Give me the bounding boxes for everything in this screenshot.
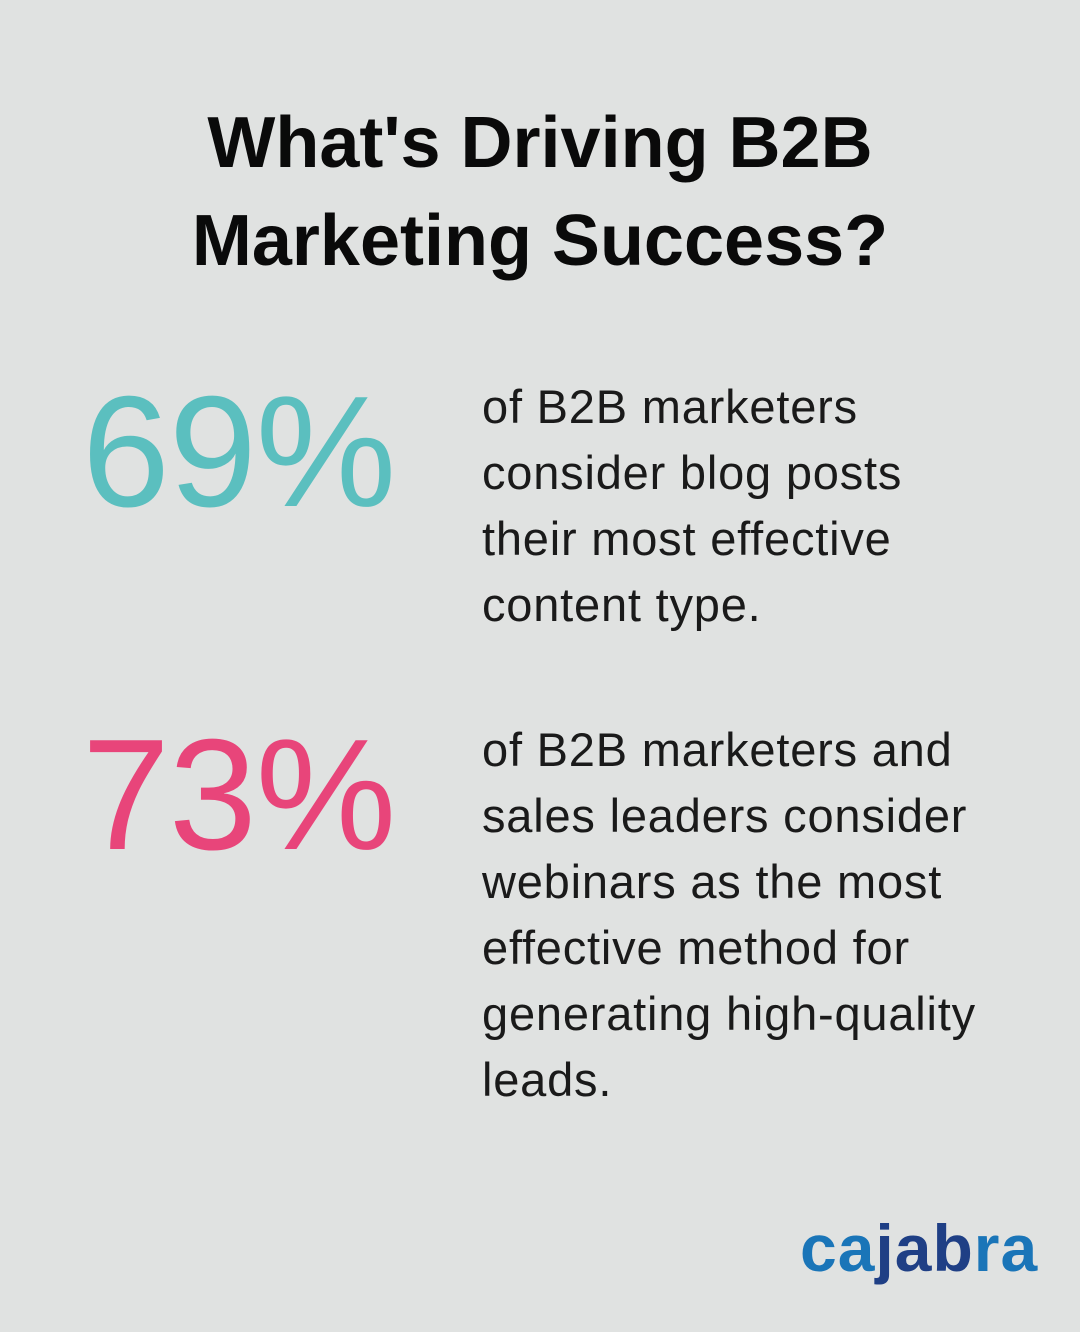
text: webinars: of B2B marketers and [482,723,953,776]
text: webinars: webinars as the most [482,855,942,908]
title [192,103,888,281]
text: webinars: effective method for [482,921,910,974]
text: webinars: leads. [482,1053,612,1106]
text: blog posts: consider blog posts [482,446,902,499]
title: Marketing Success? [192,201,888,281]
text: blog posts: of B2B marketers [482,380,858,433]
text: webinars [482,723,976,1106]
text: webinars: sales leaders consider [482,789,967,842]
text: blog posts: content type. [482,578,762,631]
text: webinars: generating high-quality [482,987,976,1040]
stat: 69%: 69% [82,364,395,540]
text: blog posts: their most effective [482,512,892,565]
logo: cajabra [800,1211,1038,1285]
text: blog posts [482,380,902,631]
title: What's Driving B2B [207,103,873,183]
stat: 73%: 73% [82,707,395,883]
